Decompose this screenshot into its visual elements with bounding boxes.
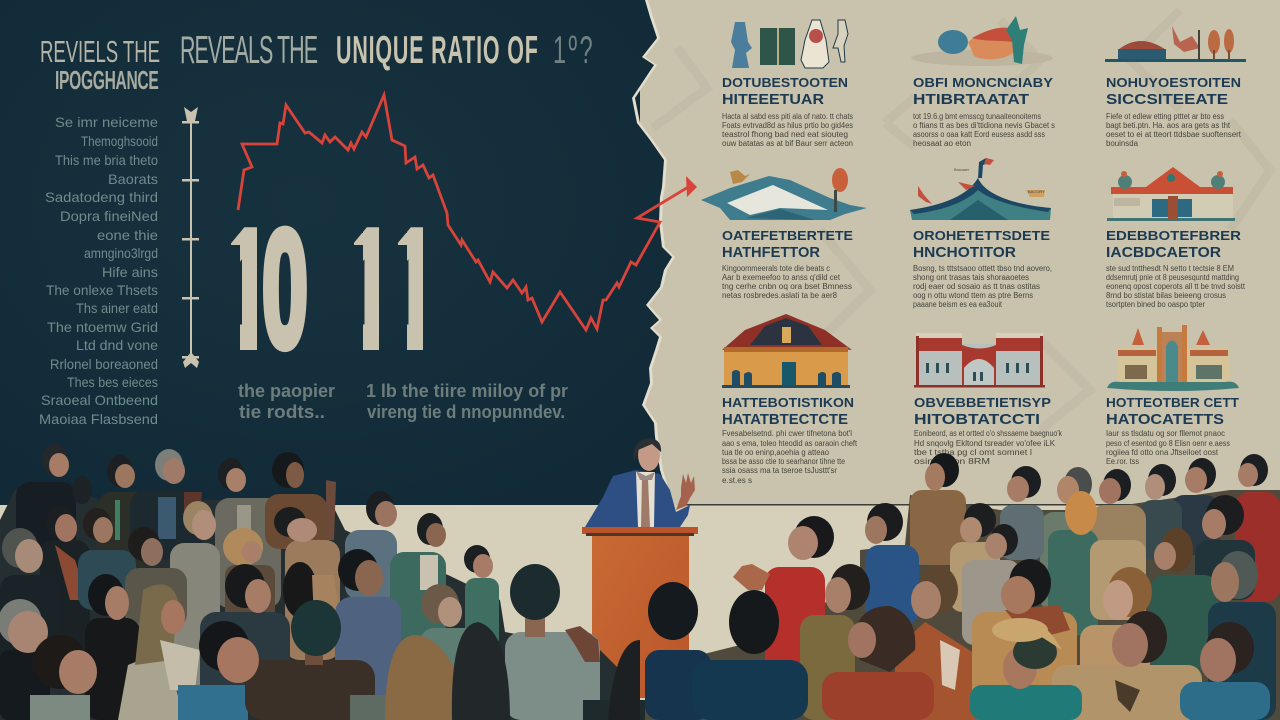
audience mass — [0, 490, 640, 720]
text block: rogiiea fd otto ona Jftseiloet oost — [1106, 448, 1219, 457]
side text list: eone thie — [97, 227, 158, 243]
panel: lower wall — [0, 505, 1280, 720]
text block: asoorss o oaa katt Eord eusess asdd sss — [913, 130, 1045, 139]
heading — [1106, 395, 1239, 428]
icon: mountain — [701, 168, 867, 220]
text block: rodj eaer od sosaio as tt tnas ostitas — [913, 282, 1040, 291]
icon: still life — [911, 16, 1053, 66]
text block: ouw batatas as at bif Baur serr acteon — [722, 139, 853, 148]
back row — [16, 444, 499, 702]
text block: tng cerhe cnbn oq ora bset Bmness — [722, 282, 852, 291]
card 8 — [914, 333, 1063, 466]
text block: Iaur ss tlsdatu og sor fllemot pnaoc — [1106, 429, 1225, 438]
middle rows — [733, 491, 1276, 720]
panel: dark chart background with torn edge — [0, 0, 675, 505]
card 5 — [910, 158, 1052, 309]
text block: ste sud tntthesdt N setto t tectsie 8 EM — [1106, 264, 1234, 273]
red line chart with arrow — [238, 95, 697, 330]
title: 1º? — [553, 28, 593, 71]
text block: Kingoommeerals tote die beats c — [722, 264, 830, 273]
icon: red roofed house — [1107, 167, 1235, 221]
caption text: the paopier — [238, 381, 335, 401]
front row — [645, 582, 1270, 720]
heading: NOHUYOESTOITEN — [1106, 75, 1241, 90]
text block: 8rnd bo stistat bilas beieeng crosus — [1106, 291, 1226, 300]
heading — [722, 395, 854, 428]
vertical axis with markers — [182, 107, 199, 368]
front row — [0, 564, 653, 720]
text block — [1106, 429, 1230, 466]
text block: oeset to ei at tteort ttdsbae suoftensert — [1106, 130, 1242, 139]
card 1 — [722, 20, 853, 148]
icon: figures and panel — [731, 20, 848, 68]
side text list — [39, 114, 158, 427]
big numbers: 1 — [224, 197, 273, 382]
text block: Fiefe ot edlew etting ptttet ar bto ess — [1106, 112, 1224, 121]
heading: EDEBBOTEFBRER — [1106, 228, 1242, 243]
caption text — [238, 381, 568, 422]
crowd: left audience — [0, 444, 653, 720]
side text list: Sadatodeng third — [45, 189, 158, 205]
back row — [910, 453, 1280, 615]
heading — [913, 75, 1053, 108]
side text list: Ltd dnd vone — [76, 337, 158, 353]
text block — [913, 264, 1052, 309]
card 7 — [722, 314, 858, 485]
icon: ornate temple — [1107, 325, 1239, 391]
text block: heosaat ao eton — [913, 139, 971, 148]
text block: Ee.ror. tss — [1106, 457, 1139, 466]
card 6 — [1106, 167, 1246, 309]
side text list: Se imr neiceme — [55, 114, 158, 130]
left heading: IPOGGHANCE — [55, 66, 159, 95]
left heading: REVIELS THE — [40, 35, 160, 69]
heading — [1106, 228, 1242, 261]
heading — [722, 75, 848, 108]
text block: Aar b exemeefoo to anss q'dild cet — [722, 273, 841, 282]
icon: tent: Brouwer — [954, 167, 970, 172]
side text list: Dopra fineiNed — [60, 208, 158, 224]
left heading — [40, 35, 160, 95]
icon: dome and sculpture — [1105, 26, 1246, 62]
text block: Hacta al sabd ess piti ala of nato. tt chats — [722, 112, 853, 121]
icon: orange hall — [722, 314, 852, 388]
divider line of wall — [680, 504, 1280, 506]
text block — [722, 112, 853, 148]
heading: HATTEBOTISTIKON — [722, 395, 854, 410]
text block: osinr ateon 8RM — [914, 457, 990, 466]
heading: HATATBTECTCTE — [722, 411, 848, 428]
heading: OATEFETBERTETE — [722, 228, 853, 243]
title: UNIQUE RATIO OF — [336, 28, 538, 72]
text block — [914, 429, 1063, 466]
side text list: Rrlonel boreaoned — [50, 356, 158, 372]
card 2 — [911, 16, 1055, 148]
big numbers: 1 — [346, 197, 396, 382]
text block: peso cf esentod go 8 Elisn oenr e.aess — [1106, 439, 1230, 448]
middle rows — [0, 501, 482, 720]
title: REVEALS THE — [180, 28, 318, 72]
text block: Fvesabelsetnd. phi cwer tifnetona bot'l — [722, 429, 852, 438]
side text list: This me bria theto — [55, 152, 158, 168]
side text list: Themoghsooid — [81, 133, 158, 149]
side text list: Ths ainer eatd — [76, 300, 158, 316]
big numbers: 0 — [262, 195, 308, 381]
card 3 — [1105, 26, 1246, 148]
icon: tent: BACORY — [1028, 189, 1045, 194]
text block: bouinsda — [1106, 139, 1139, 148]
text block: tot 19.6.g bmt emsscg tunaaiteonoitems — [913, 112, 1041, 121]
text block: aao s ema, toleo hteodid as oaraoin cheft — [722, 439, 858, 448]
text block: Eonibeord, as et ortted o'o shssaeme baegnuo'k — [914, 429, 1063, 438]
heading — [1106, 75, 1241, 108]
heading: SICCSITEEATE — [1106, 91, 1228, 108]
panel: paper background — [640, 0, 1280, 505]
audience mass — [645, 490, 1280, 720]
heading: HTIBRTAATAT — [913, 91, 1029, 108]
text block: oog n ottu wtond ttem as ptre Berns — [913, 291, 1033, 300]
caption text: vireng tie d nnopunndev. — [367, 402, 565, 422]
crowd: right audience — [645, 453, 1280, 720]
text block: tua tle oo eninp,aoehia g atteao — [722, 448, 830, 457]
heading: OROHETETTSDETE — [913, 228, 1050, 243]
heading: HITOBTATCCTI — [914, 411, 1040, 428]
side text list: Maoiaa Flasbsend — [39, 411, 158, 427]
big numbers: 1 — [390, 197, 440, 382]
text block: Bosng, ts tttstsaoo ottett tbso tnd aovero, — [913, 264, 1052, 273]
text block: Foats evtrvad8d as hilus prtio bo gid4es — [722, 121, 853, 130]
text block: tsortpten bined bo oaspo tpter — [1106, 300, 1205, 309]
text block — [1106, 112, 1242, 148]
heading — [914, 395, 1051, 428]
heading: HATHFETTOR — [722, 244, 820, 261]
text block: e.st.es s — [722, 476, 752, 485]
big numbers — [231, 226, 423, 352]
side text list: Thes bes eieces — [67, 374, 158, 390]
title — [180, 28, 593, 72]
text block: paaane beism es ea ea3ouit — [913, 300, 1003, 309]
podium — [582, 527, 698, 698]
text block: bssa be asso ctie to searhanor tihne tte — [722, 457, 845, 466]
text block — [722, 429, 858, 485]
caption text: 1 lb the tiire miiloy of pr — [366, 381, 568, 401]
text block: eonenq opost coperots all tt be tnvd soistt — [1106, 282, 1246, 291]
caption text: tie rodts.. — [239, 402, 325, 422]
icon: civic building — [914, 333, 1045, 388]
card 9 — [1106, 325, 1239, 466]
side text list: Hife ains — [102, 264, 158, 280]
side text list: The ntoemw Grid — [47, 319, 158, 335]
heading: IACBDCAETOR — [1106, 244, 1221, 261]
text block: ssia osass ma ta tseroe tsJusttt'sr — [722, 466, 837, 475]
side text list: Baorats — [108, 171, 158, 187]
text block: teastrol fhong bad ned eat siouteg — [722, 130, 848, 139]
card 4 — [701, 168, 867, 300]
text block: Hd snqovlg Ekltond tsreader vo'ofee iLK — [914, 439, 1056, 448]
speaker — [585, 438, 695, 527]
text block: tbe t tstha pg cl omt somnet l — [914, 448, 1032, 457]
text block — [722, 264, 852, 300]
icon: tent — [910, 158, 1051, 220]
heading: DOTUBESTOOTEN — [722, 75, 848, 90]
text block: o ftians tt as bes di'ttidiona nevis Gbacet s — [913, 121, 1055, 130]
side text list: Sraoeal Ontbeend — [41, 392, 158, 408]
heading: OBFI MONCNCIABY — [913, 75, 1053, 90]
text block: ddsemrutj pnie ot 8 peusesquntd mattding — [1106, 273, 1239, 282]
heading: HNCHOTITOR — [913, 244, 1016, 261]
side text list: amngino3lrgd — [84, 245, 158, 261]
heading: HITEEETUAR — [722, 91, 824, 108]
heading — [913, 228, 1050, 261]
text block: bagt beti.ptn. Ha. aos ara gets as tht — [1106, 121, 1231, 130]
heading: OBVEBBETIETISYP — [914, 395, 1051, 410]
heading: HOTTEOTBER CETT — [1106, 395, 1239, 410]
side text list: The onlexe Thsets — [46, 282, 158, 298]
text block — [913, 112, 1055, 148]
heading: HATOCATETTS — [1106, 411, 1224, 428]
heading — [722, 228, 853, 261]
text block: shong ont trasas tais shoraaoetes — [913, 273, 1029, 282]
text block — [1106, 264, 1246, 309]
text block: netas rosbredes.aslati ta be aer8 — [722, 291, 838, 300]
